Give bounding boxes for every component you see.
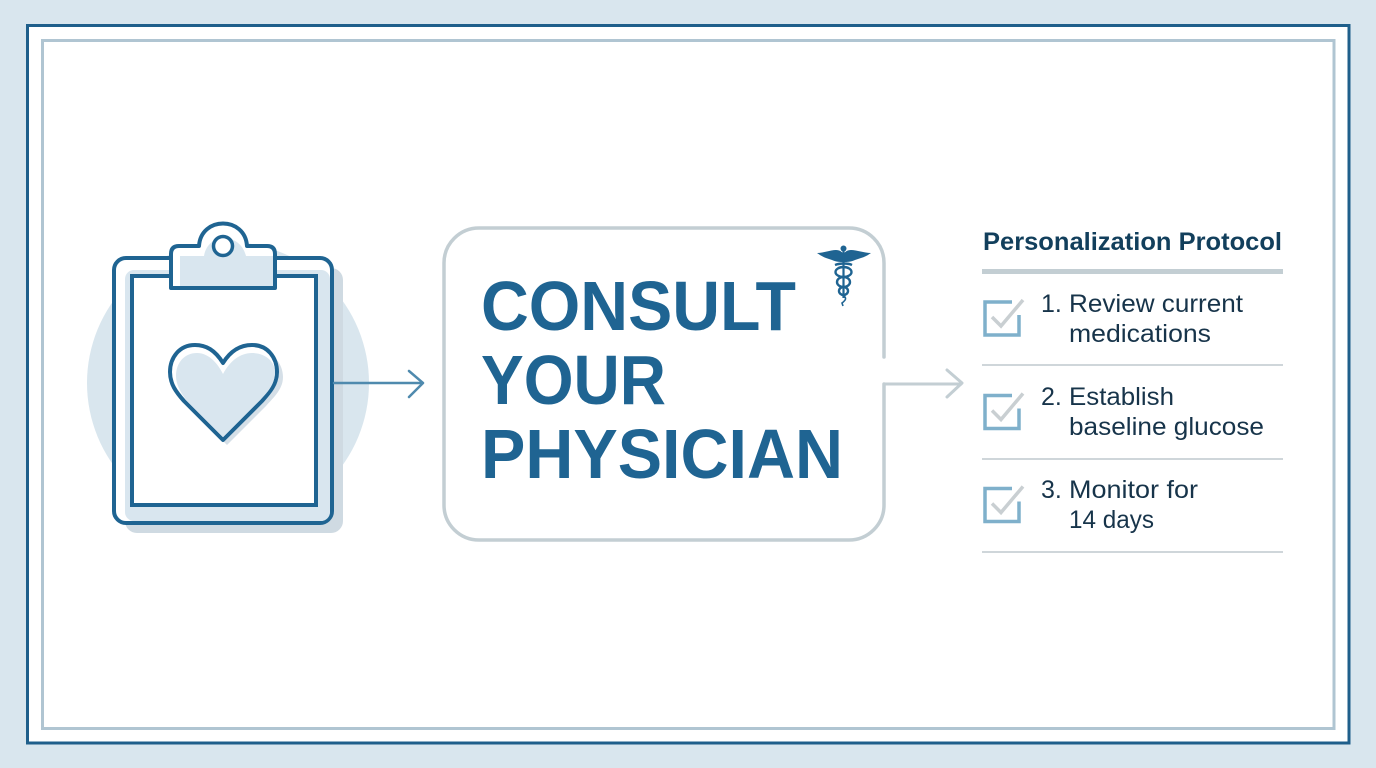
- step 3: 3.: [1041, 476, 1062, 504]
- arrow: clipboard to consult box: [334, 371, 423, 397]
- step 2: [985, 383, 1264, 441]
- clipboard paper: [132, 276, 316, 505]
- background circle: [87, 242, 369, 524]
- heading: consult your physician: YOUR: [481, 341, 666, 419]
- icon: caduceus: [817, 246, 871, 306]
- panel: personalization protocol: [982, 228, 1283, 553]
- heading: consult your physician: PHYSICIAN: [481, 415, 843, 493]
- step 3: 14 days: [1069, 506, 1154, 534]
- heart shadow: [174, 350, 283, 445]
- heading: consult your physician: CONSULT: [481, 267, 796, 345]
- step 1: 1.: [1041, 290, 1062, 318]
- clipboard shadow: [125, 268, 343, 533]
- heading rule: [982, 269, 1283, 274]
- arrow: consult box to protocol: [884, 370, 962, 410]
- heading: personalization protocol: Personalization Protocol: [983, 228, 1282, 256]
- clipboard clip: [171, 224, 275, 288]
- step 1: medications: [1069, 320, 1211, 348]
- step 3: Monitor for: [1069, 476, 1198, 504]
- icon: clipboard with heart: [87, 224, 369, 533]
- step 1: [985, 290, 1243, 348]
- step 3: [985, 476, 1198, 534]
- panel: consult box: [444, 228, 884, 540]
- step 2: baseline glucose: [1069, 413, 1264, 441]
- heart: [170, 345, 277, 440]
- clipboard board: [114, 258, 332, 523]
- step 2: Establish: [1069, 383, 1174, 411]
- step 2: 2.: [1041, 383, 1062, 411]
- step 1: Review current: [1069, 290, 1243, 318]
- heading: consult your physician: [481, 267, 843, 493]
